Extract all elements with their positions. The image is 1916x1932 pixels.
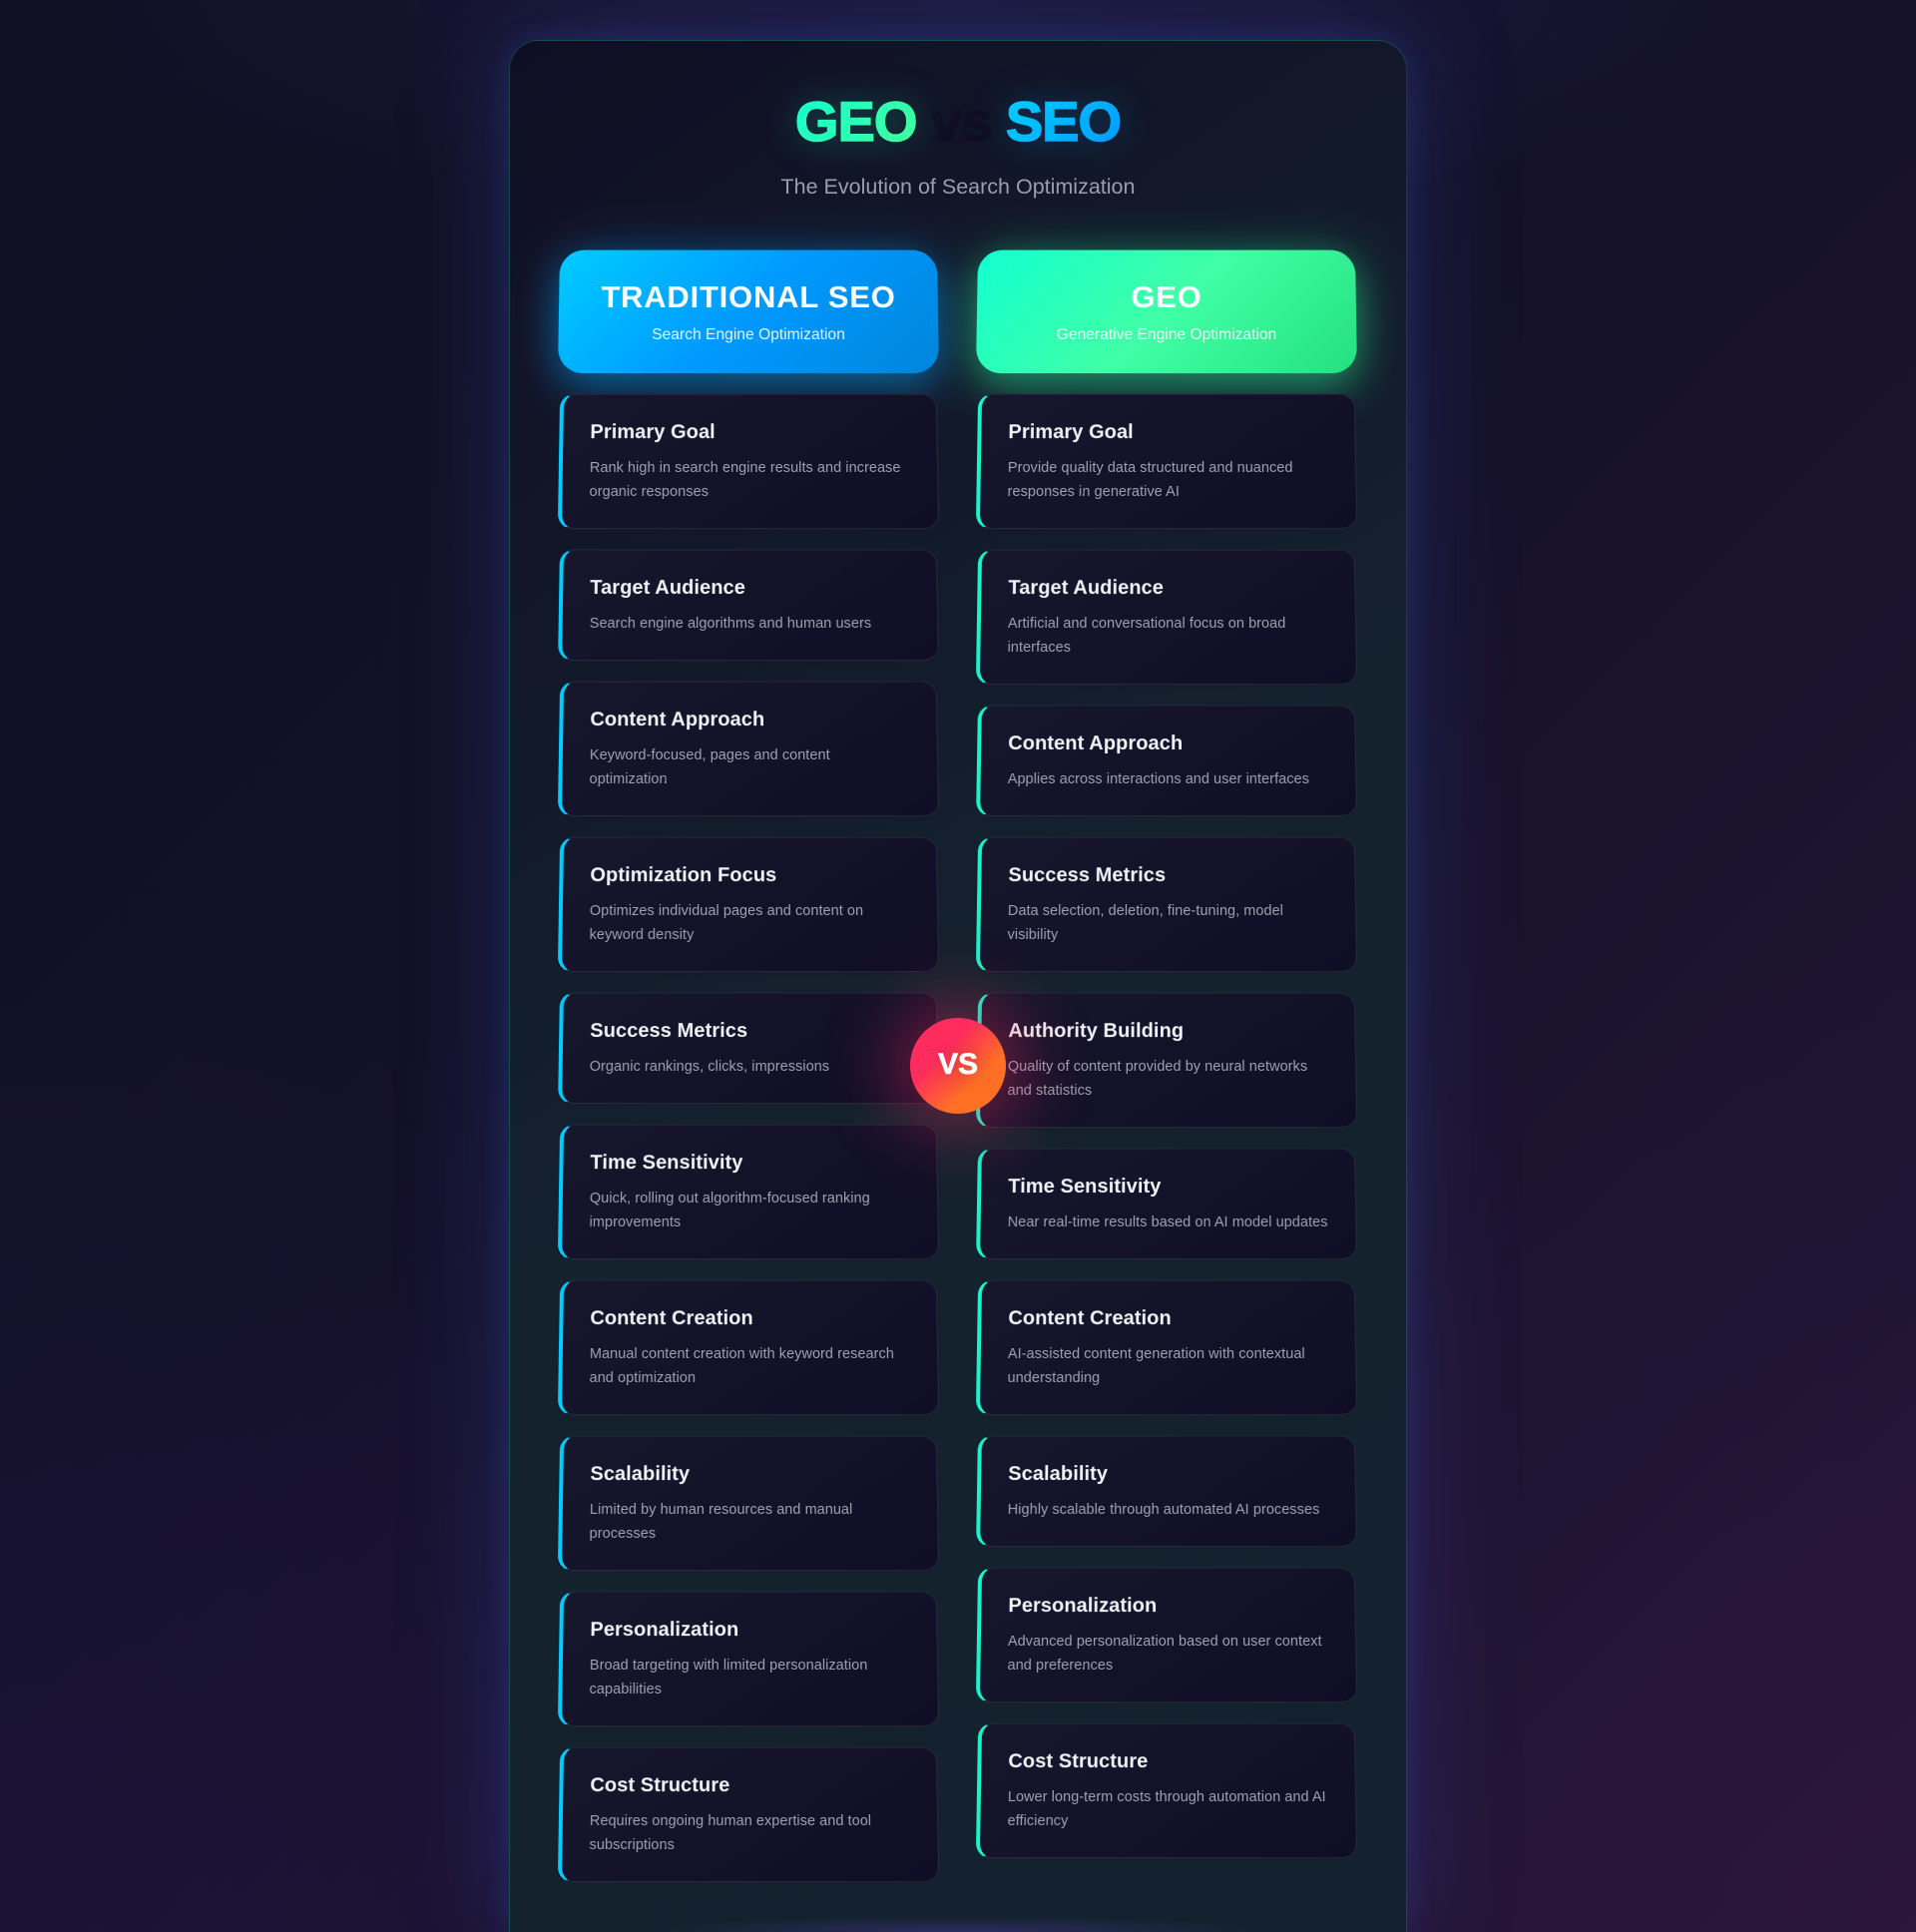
subtitle: The Evolution of Search Optimization	[781, 175, 1135, 199]
card: primary goal	[558, 394, 939, 529]
card: personalization: Advanced personalization based on user context and preferences	[1007, 1634, 1322, 1674]
card: scalability: Limited by human resources and manual processes	[589, 1502, 852, 1542]
card: success metrics	[976, 837, 1357, 972]
card: time sensitivity	[558, 1125, 939, 1259]
card: cost structure: Lower long-term costs through automation and AI efficiency	[1007, 1789, 1326, 1829]
column heading: traditional SEO: Search Engine Optimization	[652, 326, 845, 343]
card: optimization focus: Optimizes individual pages and content on keyword density	[589, 903, 863, 943]
card: personalization: Broad targeting with limited personalization capabilities	[589, 1658, 868, 1697]
column: traditional SEO	[527, 226, 968, 1882]
card: optimization focus	[558, 837, 939, 972]
card: content creation: Manual content creation with keyword research and optimization	[589, 1346, 894, 1386]
card: content approach	[976, 705, 1357, 816]
VS badge: VS	[938, 1048, 978, 1081]
card: target audience: Target Audience	[590, 577, 745, 599]
column heading: GEO: GEO	[1131, 279, 1202, 314]
title: GEO	[795, 90, 916, 153]
card: success metrics: Success Metrics	[1008, 864, 1166, 886]
card: primary goal: Rank high in search engine results and increase organic responses	[589, 460, 901, 500]
card: target audience: Target Audience	[1008, 577, 1164, 599]
card: scalability	[976, 1435, 1357, 1547]
column heading: GEO: Generative Engine Optimization	[1057, 326, 1276, 343]
card: success metrics: Data selection, deletion, fine-tuning, model visibility	[1007, 903, 1283, 943]
card: success metrics	[558, 992, 939, 1104]
card: content creation	[558, 1280, 939, 1415]
card: time sensitivity: Time Sensitivity	[590, 1152, 743, 1174]
card: success metrics: Organic rankings, clicks, impressions	[590, 1059, 829, 1075]
card: content approach: Content Approach	[1008, 732, 1183, 754]
title	[788, 88, 1128, 156]
card: authority building: Quality of content provided by neural networks and statistics	[1007, 1059, 1307, 1099]
title: SEO	[1006, 90, 1121, 153]
card: scalability	[558, 1436, 939, 1571]
card: content approach: Keyword-focused, pages and content optimization	[589, 747, 830, 787]
card: content approach: Applies across interactions and user interfaces	[1008, 771, 1309, 787]
card: scalability: Scalability	[1008, 1463, 1108, 1485]
card: cost structure: Requires ongoing human expertise and tool subscriptions	[589, 1813, 871, 1853]
column heading: GEO	[976, 250, 1357, 373]
card: personalization	[558, 1592, 939, 1726]
column: GEO	[946, 225, 1387, 1858]
card: target audience: Search engine algorithms and human users	[590, 616, 871, 632]
card: optimization focus: Optimization Focus	[590, 864, 776, 886]
panel: main container	[509, 40, 1407, 1932]
card: content approach: Content Approach	[590, 709, 764, 730]
card: cost structure: Cost Structure	[590, 1774, 729, 1796]
card: primary goal	[976, 394, 1357, 529]
card: content creation: AI-assisted content generation with contextual understanding	[1007, 1346, 1305, 1386]
card: authority building: Authority Building	[1008, 1020, 1184, 1042]
VS badge	[910, 1018, 1006, 1114]
card: scalability: Highly scalable through automated AI processes	[1008, 1502, 1319, 1518]
card: cost structure	[976, 1723, 1357, 1858]
card: target audience	[558, 549, 939, 661]
column heading: traditional SEO: TRADITIONAL SEO	[601, 279, 896, 314]
card: cost structure: Cost Structure	[1008, 1750, 1148, 1772]
card: time sensitivity: Quick, rolling out algorithm-focused ranking improvements	[589, 1191, 870, 1230]
card: success metrics: Success Metrics	[590, 1020, 747, 1042]
card: time sensitivity	[976, 1148, 1357, 1259]
card: time sensitivity: Near real-time results based on AI model updates	[1008, 1214, 1328, 1230]
card: content creation	[976, 1280, 1357, 1415]
card: time sensitivity: Time Sensitivity	[1008, 1176, 1162, 1198]
card: scalability: Scalability	[590, 1463, 690, 1485]
card: content creation: Content Creation	[590, 1307, 753, 1329]
card: content creation: Content Creation	[1008, 1307, 1172, 1329]
card: personalization: Personalization	[590, 1619, 738, 1641]
card: personalization: Personalization	[1008, 1595, 1157, 1617]
card: cost structure	[558, 1747, 939, 1882]
card: target audience	[976, 550, 1357, 685]
card: content approach	[558, 682, 939, 816]
card: primary goal: Provide quality data structured and nuanced responses in generative AI	[1007, 460, 1293, 500]
column heading: traditional SEO	[558, 250, 939, 373]
title: vs	[931, 90, 991, 153]
card: primary goal: Primary Goal	[1008, 421, 1134, 443]
card: authority building	[976, 993, 1357, 1128]
card: personalization	[976, 1568, 1357, 1702]
card: target audience: Artificial and conversational focus on broad interfaces	[1007, 616, 1285, 656]
card: primary goal: Primary Goal	[590, 421, 716, 443]
